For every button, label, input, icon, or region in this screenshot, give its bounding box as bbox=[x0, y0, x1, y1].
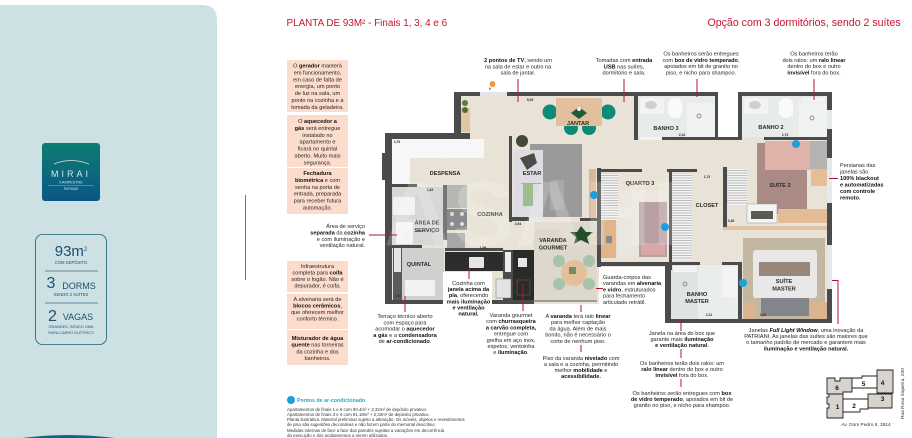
callout: tomadas USB: USB nas suítes, bbox=[604, 64, 644, 70]
room: banho 2 bbox=[742, 96, 827, 137]
callout: dois ralos master: ralo linear dentro do box e outro bbox=[641, 367, 723, 373]
room: area de servico bbox=[393, 197, 440, 244]
stat: 93m2: COM DEPÓSITO bbox=[55, 260, 88, 265]
stat: 93m2: 93m bbox=[55, 243, 84, 260]
callout: pontos de TV bbox=[484, 58, 552, 102]
text: gerador: tomada da geladeira. bbox=[291, 105, 344, 111]
callout: persianas: janelas são bbox=[839, 170, 868, 176]
callout: dois ralos master bbox=[640, 349, 724, 379]
callout: churrasqueira: Varanda gourmet bbox=[490, 313, 533, 319]
panel: floor plan bbox=[382, 92, 832, 323]
logo: Mirai Campestre bbox=[42, 143, 100, 201]
room: suite master bbox=[743, 238, 827, 320]
callout: box master bbox=[631, 379, 733, 409]
air conditioning points bbox=[590, 140, 800, 287]
stat: 2 vagas: 2 bbox=[48, 308, 57, 325]
room: suite 2 bbox=[723, 141, 827, 230]
callout: dois ralos master: Os banheiros terão dois ralos: um bbox=[640, 361, 724, 367]
room: banho 3 bbox=[638, 96, 715, 137]
room dimensions: 1,63 bbox=[427, 188, 433, 192]
room: quarto 3 bbox=[589, 169, 669, 258]
room dimensions: 2,44 bbox=[679, 133, 685, 137]
callout: pontos de TV: sala de jantar. bbox=[501, 71, 536, 77]
room dimensions: 1,74 bbox=[704, 175, 710, 179]
text: coifa: Infraestrutura bbox=[301, 264, 335, 270]
callout: full light window: Janelas Full Light Window, uma inovação da bbox=[749, 328, 863, 334]
room dimensions: 1,99 bbox=[480, 246, 486, 250]
callout: piso nivelado: melhor mobilidade e bbox=[555, 368, 607, 374]
callout: terraco tecnico: acomodar o aquecedor bbox=[375, 327, 435, 333]
callout: piso nivelado: acessibilidade. bbox=[561, 374, 601, 380]
callout: dois ralos master: invisível fora do box. bbox=[655, 373, 709, 379]
footnotes: Planta ilustrativa. Material preliminar sujeito a alteração. Os móveis, objetos e revestimentos bbox=[287, 417, 466, 422]
callout: churrasqueira: espetos, ventoinha bbox=[488, 344, 535, 350]
text: fechadura: para receber futura bbox=[294, 199, 342, 205]
callout: box master: granito no piso, e nicho para shampoo. bbox=[634, 403, 731, 409]
text: misturador: da cozinha e dos bbox=[296, 349, 339, 355]
text: gerador: em funcionamento, bbox=[294, 70, 342, 76]
footnotes: Apartamentos de finais 3 e 4 com 91,18m² + 2,32m² de depósito privativo. bbox=[287, 412, 430, 417]
room: banho master: MASTER bbox=[685, 299, 709, 305]
callout: area de servico bbox=[310, 223, 397, 249]
callout: piso nivelado: a sala e a cozinha, permitindo bbox=[544, 362, 618, 368]
callout: box de vidro: apoiados em bit de granito no bbox=[664, 64, 738, 70]
callout: guarda-corpos: articulado retrátil. bbox=[603, 300, 646, 306]
callout: churrasqueira: entregue com bbox=[494, 332, 528, 338]
callout: janela da cozinha: Cozinha com bbox=[452, 281, 485, 287]
room: banho master bbox=[672, 265, 738, 320]
panel: left feature boxes bottom bbox=[287, 261, 348, 365]
text: misturador: quente nas torneiras bbox=[291, 343, 344, 349]
room: cozinha: COZINHA bbox=[477, 212, 503, 218]
callout: persianas: remoto. bbox=[840, 196, 861, 202]
panel: left feature boxes top bbox=[287, 60, 348, 214]
footnotes: Medidas internas de face a face das paredes sujeitas a variações em decorrência bbox=[287, 428, 445, 433]
text: coifa: completa para coifa bbox=[292, 270, 343, 276]
room dimensions: 3,76 bbox=[394, 140, 400, 144]
callout: guarda-corpos bbox=[596, 267, 665, 313]
callout: pontos de TV: 2 pontos de TV, sendo um bbox=[484, 58, 552, 64]
text: aquecedor: apartamento e bbox=[299, 140, 336, 146]
watermark: ASAHI bbox=[384, 163, 680, 265]
callout: janela no box bbox=[649, 320, 715, 349]
callout: janela no box: Janela na área do box que bbox=[649, 331, 715, 337]
text: coifa: depurador, é coifa. bbox=[294, 284, 341, 290]
callout: persianas: 100% blackout bbox=[840, 176, 879, 182]
stat: 2 vagas: GRANDES, SENDO UMA bbox=[49, 324, 94, 329]
callout: janela da cozinha: mais iluminação bbox=[447, 299, 491, 305]
callout: guarda-corpos: varandas em alvenaria bbox=[603, 281, 661, 287]
key plan: 2 bbox=[852, 403, 856, 410]
stat: 2 vagas: PARA CARRO ELÉTRICO bbox=[48, 330, 94, 335]
key plan bbox=[827, 368, 906, 428]
callout: area de servico: separada da cozinha bbox=[310, 230, 365, 236]
callout: ralo da varanda: bonito, não é necessário o bbox=[545, 333, 611, 339]
room dimensions bbox=[394, 98, 788, 317]
room: banho master: BANHO bbox=[687, 292, 708, 298]
callout: area de servico: e com iluminação e bbox=[317, 237, 365, 243]
callout: dois ralos: dentro do box e outro bbox=[787, 64, 841, 70]
callout: ralo da varanda: A varanda terá ralo linear bbox=[545, 314, 611, 320]
callout: piso nivelado: Piso da varanda nivelado com bbox=[543, 356, 619, 362]
callout: churrasqueira: grelha em aço inox, bbox=[487, 338, 536, 344]
subtitle: Opção com 3 dormitórios, sendo 2 suítes bbox=[708, 17, 901, 29]
room dimensions: 3,49 bbox=[760, 313, 766, 317]
room: closet: CLOSET bbox=[696, 203, 719, 209]
callout: terraco tecnico: de ar-condicionado. bbox=[379, 339, 431, 345]
stat: 93m2 bbox=[55, 243, 88, 265]
callout: churrasqueira bbox=[486, 284, 537, 356]
text: aquecedor: O aquecedor a bbox=[298, 119, 337, 125]
text: alvenaria: A alvenaria será de bbox=[294, 297, 341, 303]
text: gerador: em caso de falta de bbox=[293, 77, 342, 83]
callout: terraco tecnico bbox=[373, 296, 438, 345]
room: banho 2: BANHO 2 bbox=[758, 125, 784, 131]
stat: 2 vagas: VAGAS bbox=[63, 312, 93, 322]
room: suite master: MASTER bbox=[772, 286, 796, 292]
room: suite 2: SUÍTE 2 bbox=[769, 181, 791, 189]
callout: dois ralos: invisível fora do box. bbox=[787, 70, 841, 76]
stat: 3 dorms: SENDO 2 SUÍTES bbox=[54, 292, 89, 297]
room: despensa bbox=[392, 139, 484, 184]
room dimensions: 1,50 bbox=[395, 294, 401, 298]
callout: ralo da varanda: da água. Além de mais bbox=[550, 326, 607, 332]
text: aquecedor: ficará no quintal bbox=[298, 147, 337, 153]
text: misturador: Misturador de água bbox=[292, 336, 344, 342]
callout: tomadas USB bbox=[596, 58, 653, 102]
key plan: 1 bbox=[836, 404, 840, 411]
callout: box de vidro bbox=[662, 52, 740, 97]
callout: ralo da varanda bbox=[545, 305, 611, 345]
callout: persianas: com controle bbox=[840, 189, 875, 195]
room: area de servico: SERVIÇO bbox=[414, 228, 440, 234]
room: varanda gourmet: GOURMET bbox=[539, 246, 568, 252]
logo: Mirai Campestre: CAMPESTRE bbox=[59, 180, 83, 184]
stats box bbox=[36, 234, 106, 344]
footnotes: de piso são sugestões decorativas e não fazem parte do memorial descritivo. bbox=[287, 422, 436, 427]
callout: janela da cozinha: e ventilação bbox=[452, 305, 485, 311]
room: jantar: JANTAR bbox=[567, 121, 589, 127]
text: aquecedor: segurança. bbox=[304, 160, 332, 166]
callout: terraco tecnico: com espaço para bbox=[384, 320, 427, 326]
callout: churrasqueira: e iluminação. bbox=[493, 350, 529, 356]
footnotes: Apartamentos de finais 1 e 6 com 90,4m² + 2,32m² de depósito privativo. bbox=[287, 407, 427, 412]
stat: 3 dorms: DORMS bbox=[62, 281, 96, 291]
stat: 3 dorms: 3 bbox=[47, 275, 56, 292]
text: aquecedor: instalado no bbox=[302, 133, 333, 139]
callout: janela da cozinha: janela acima da bbox=[447, 287, 490, 293]
callout: area de servico: Área de serviço bbox=[326, 223, 365, 230]
callout: churrasqueira: a carvão completa, bbox=[486, 325, 537, 331]
room dimensions: 2,73 bbox=[782, 133, 788, 137]
callout: janela da cozinha bbox=[443, 268, 492, 318]
callout: ralo da varanda: corte de nenhum piso. bbox=[550, 339, 606, 345]
callout: janela no box: e ventilação natural. bbox=[655, 343, 709, 349]
text: misturador: banheiros. bbox=[304, 356, 331, 362]
stat: 3 dorms bbox=[47, 275, 96, 297]
callout: piso nivelado bbox=[543, 345, 620, 380]
callout: guarda-corpos: para fechamento bbox=[603, 294, 645, 300]
callout: dois ralos bbox=[782, 52, 846, 100]
title: PLANTA DE 93M² - Finais 1, 3, 4 e 6 bbox=[286, 18, 448, 29]
callout: tomadas USB: dormitório e sala. bbox=[603, 71, 646, 77]
key plan: 4 bbox=[881, 380, 885, 387]
callout: terraco tecnico: a gás e a condensadora bbox=[373, 333, 437, 339]
walls bbox=[382, 92, 832, 323]
callout: ralo da varanda: para melhor captação bbox=[551, 320, 605, 326]
callout: dois ralos: Os banheiros terão bbox=[790, 52, 838, 58]
callout: full light window bbox=[744, 280, 868, 352]
callout: guarda-corpos: e vidro, estruturados bbox=[603, 287, 656, 293]
callout: area de servico: ventilação natural. bbox=[320, 243, 365, 249]
callout: tomadas USB: Tomadas com entrada bbox=[596, 58, 652, 64]
key plan: Rua Rosa Siqueira, 200 bbox=[900, 368, 906, 419]
room dimensions: 3,48 bbox=[728, 219, 734, 223]
callout: box de vidro: Os banheiros serão entregues bbox=[663, 52, 739, 58]
room: banho 3: BANHO 3 bbox=[653, 126, 679, 132]
callout: full light window: PATRIANI. As janelas das suítes são maiores que bbox=[744, 334, 868, 340]
text: coifa: sobre o fogão. Não é bbox=[291, 277, 344, 283]
callout: persianas: e automatizadas bbox=[840, 182, 884, 188]
text: gerador: energia, um ponto bbox=[295, 84, 340, 90]
callout: janela da cozinha: pia, oferecendo bbox=[449, 293, 488, 299]
room: quintal bbox=[393, 248, 435, 300]
room: varanda gourmet: VARANDA bbox=[539, 238, 567, 244]
room: quarto 3: QUARTO 3 bbox=[626, 181, 654, 187]
legend: pontos de ar-condicionado bbox=[287, 396, 366, 404]
callout: persianas: Persianas das bbox=[840, 163, 876, 169]
callout: full light window: o tamanho padrão de mercado e garantem mais bbox=[746, 340, 866, 346]
text: fechadura: biométrica e com bbox=[295, 178, 340, 184]
callout: full light window: iluminação e ventilação natural. bbox=[764, 346, 849, 352]
logo: Mirai Campestre: PATRIANI bbox=[64, 187, 78, 191]
key plan: 6 bbox=[835, 385, 839, 392]
logo: Mirai Campestre: MIRAI bbox=[51, 169, 91, 179]
text: alvenaria: que oferecem melhor bbox=[291, 310, 344, 316]
stat: 93m2: 2 bbox=[84, 247, 88, 253]
key plan: 3 bbox=[881, 396, 885, 403]
text: gerador: ponto na cozinha e a bbox=[292, 98, 344, 104]
callout: terraco tecnico: Terraço técnico aberto bbox=[377, 314, 433, 320]
callout: box master: de vidro temperado, apoiados em bit de bbox=[631, 397, 733, 403]
text: alvenaria: blocos cerâmicos, bbox=[293, 304, 342, 310]
text: fechadura: Fechadura bbox=[303, 171, 333, 177]
panel: left sidebar bbox=[0, 5, 217, 438]
floor bbox=[385, 92, 832, 323]
room dimensions: 5,09 bbox=[527, 98, 533, 102]
key plan: Av. Dom Pedro II, 2814 bbox=[841, 422, 891, 428]
room: estar bbox=[514, 135, 582, 217]
footnotes: da execução e dos acabamentos a serem utilizados. bbox=[287, 433, 388, 438]
text: aquecedor: gás será entregue bbox=[295, 126, 340, 132]
callout: box de vidro: com box de vidro temperado, bbox=[662, 58, 740, 64]
callout: box de vidro: piso, e nicho para shampoo. bbox=[666, 70, 737, 76]
room dimensions: 3,54 bbox=[515, 222, 521, 226]
text: fechadura: automação. bbox=[303, 206, 333, 212]
room: despensa: DESPENSA bbox=[430, 171, 460, 177]
callout: janela da cozinha: natural. bbox=[458, 312, 479, 318]
callout: guarda-corpos: Guarda-corpos das bbox=[603, 275, 651, 281]
callout: churrasqueira: com churrasqueira bbox=[486, 319, 536, 325]
room: suite master: SUÍTE bbox=[776, 277, 792, 285]
room: varanda gourmet bbox=[496, 226, 595, 302]
room: area de servico: ÁREA DE bbox=[415, 220, 440, 226]
callout: persianas bbox=[829, 163, 884, 202]
text: alvenaria: conforto térmico. bbox=[297, 316, 339, 322]
text: gerador: O gerador manterá bbox=[293, 64, 342, 70]
callout: pontos de TV: na sala de estar e outro na bbox=[485, 64, 552, 70]
room: quintal: QUINTAL bbox=[407, 262, 432, 268]
text: fechadura: entrada, preparada bbox=[294, 192, 342, 198]
text: fechadura: senha na porta de bbox=[295, 185, 340, 191]
room: jantar bbox=[461, 98, 616, 135]
callout: janela no box: garante mais iluminação bbox=[650, 337, 714, 343]
text: gerador: de luz na sala, um bbox=[295, 91, 341, 97]
icon: map pin bbox=[489, 82, 495, 90]
room dimensions: 2,12 bbox=[706, 313, 712, 317]
room: cozinha bbox=[443, 185, 503, 271]
room: closet bbox=[672, 173, 719, 260]
text: aquecedor: aberto. Muito mais bbox=[294, 154, 341, 160]
legend: pontos de ar-condicionado: Pontos de ar-condicionado bbox=[297, 398, 366, 404]
key plan: 5 bbox=[862, 381, 866, 388]
stat: 2 vagas bbox=[48, 308, 94, 335]
room: estar: ESTAR bbox=[523, 171, 541, 177]
callout: dois ralos: dois ralos: um ralo linear bbox=[782, 58, 846, 64]
callout: box master: Os banheiros serão entregues com box bbox=[633, 391, 731, 397]
